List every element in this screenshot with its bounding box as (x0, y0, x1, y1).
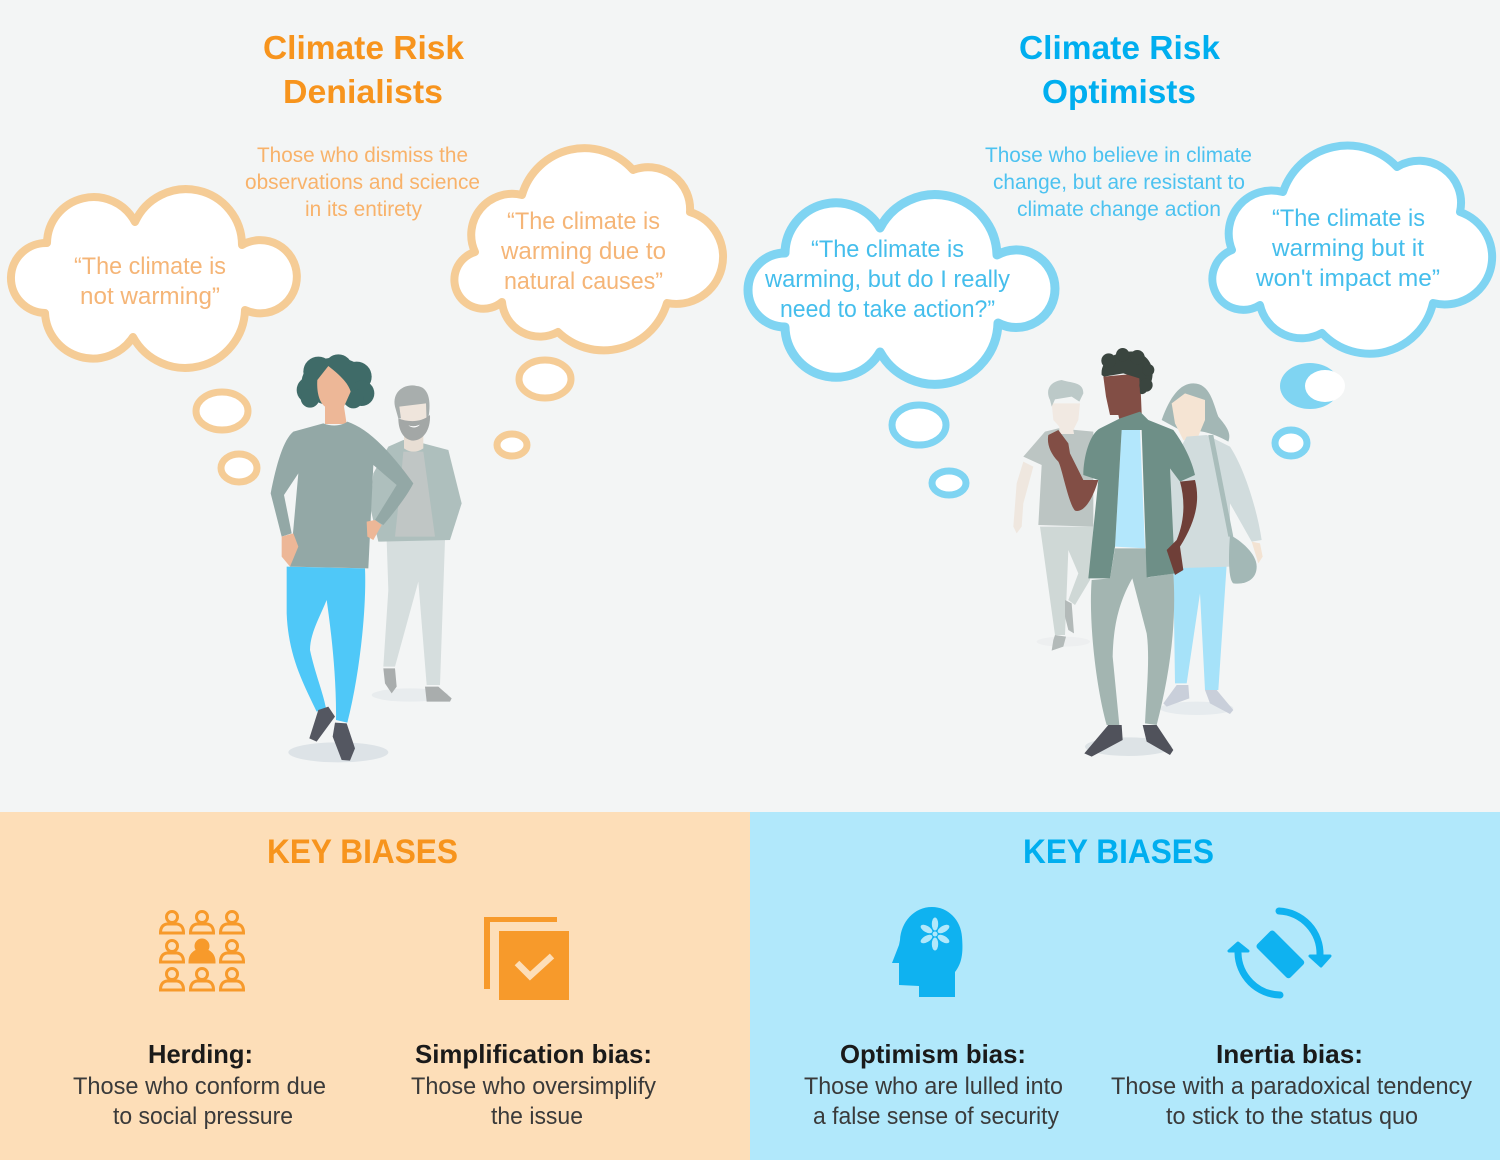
thought bubbles: optimist right (1275, 363, 1345, 456)
illustration: woman with shoulder bag in background (1160, 383, 1263, 715)
thought cloud: do I need to take action: warming, but do I really (764, 266, 1010, 293)
icon: head with flower (892, 907, 962, 997)
thought cloud: not warming (11, 189, 297, 368)
description: denialists: observations and science (245, 171, 480, 194)
description: denialists (245, 144, 480, 221)
description: denialists: Those who dismiss the (257, 144, 468, 167)
thought cloud: do I need to take action: “The climate is (811, 236, 964, 263)
title: Climate Risk Denialists: Climate Risk (263, 29, 465, 66)
thought cloud: not warming: “The climate is (74, 253, 226, 280)
text: optimism bias: a false sense of security (813, 1103, 1059, 1130)
text: herding: Those who conform due (73, 1073, 326, 1100)
text: simplification bias: the issue (491, 1103, 583, 1130)
text: simplification bias (411, 1039, 656, 1130)
text: herding (73, 1039, 326, 1130)
thought cloud: natural causes: warming due to (500, 238, 666, 265)
illustration: man with grey hair in background (1013, 380, 1093, 651)
text: optimism bias: Those who are lulled into (804, 1073, 1063, 1100)
thought cloud: won't impact me (1212, 146, 1492, 354)
text: herding: Herding: (148, 1039, 253, 1069)
illustration: woman in blue trousers (271, 354, 413, 762)
text: simplification bias: Simplification bias: (415, 1039, 652, 1069)
icon: simplification checkmark (484, 917, 569, 1000)
description: optimists: Those who believe in climate (985, 144, 1252, 167)
thought cloud: won't impact me: warming but it (1271, 235, 1424, 262)
text: optimism bias: Optimism bias: (840, 1039, 1026, 1069)
text: herding: to social pressure (113, 1103, 293, 1130)
panel: denialists key biases (0, 812, 750, 1160)
thought bubbles: optimist left (892, 405, 966, 495)
thought cloud: won't impact me: “The climate is (1272, 205, 1425, 232)
text: inertia bias: Inertia bias: (1216, 1039, 1363, 1069)
title: Climate Risk Denialists: Denialists (283, 73, 443, 110)
text: optimism bias (804, 1039, 1063, 1130)
title: Climate Risk Optimists: Climate Risk (1019, 29, 1221, 66)
thought cloud: won't impact me: won't impact me” (1255, 265, 1440, 292)
title: Climate Risk Optimists (1019, 29, 1221, 110)
thought bubbles: denialist left (196, 392, 257, 482)
description: optimists (985, 144, 1252, 221)
title: Climate Risk Denialists (263, 29, 465, 110)
text: inertia bias: Those with a paradoxical tendency (1111, 1073, 1472, 1100)
description: optimists: climate change action (1017, 198, 1221, 221)
thought cloud: not warming: not warming” (80, 283, 220, 310)
thought cloud: natural causes: natural causes” (504, 268, 663, 295)
text: inertia bias: to stick to the status quo (1166, 1103, 1418, 1130)
thought cloud: natural causes: “The climate is (507, 208, 660, 235)
title: Climate Risk Optimists: Optimists (1042, 73, 1196, 110)
panel: optimists key biases (750, 812, 1500, 1160)
icon: rotating arrows around block (1229, 911, 1330, 995)
thought cloud: do I need to take action: need to take action?” (780, 296, 995, 323)
icon: herding crowd (160, 912, 244, 990)
thought cloud: do I need to take action (748, 195, 1055, 384)
description: denialists: in its entirety (305, 198, 422, 221)
text: simplification bias: Those who oversimplify (411, 1073, 656, 1100)
heading: key biases: KEY BIASES (1023, 833, 1214, 871)
heading: key biases: KEY BIASES (267, 833, 458, 871)
illustration: man with beard (370, 385, 462, 702)
thought bubbles: denialist right (497, 360, 571, 456)
text: inertia bias (1111, 1039, 1472, 1130)
description: optimists: change, but are resistant to (993, 171, 1245, 194)
thought cloud: natural causes (454, 148, 723, 350)
illustration: man with open shirt in foreground (1048, 348, 1197, 757)
